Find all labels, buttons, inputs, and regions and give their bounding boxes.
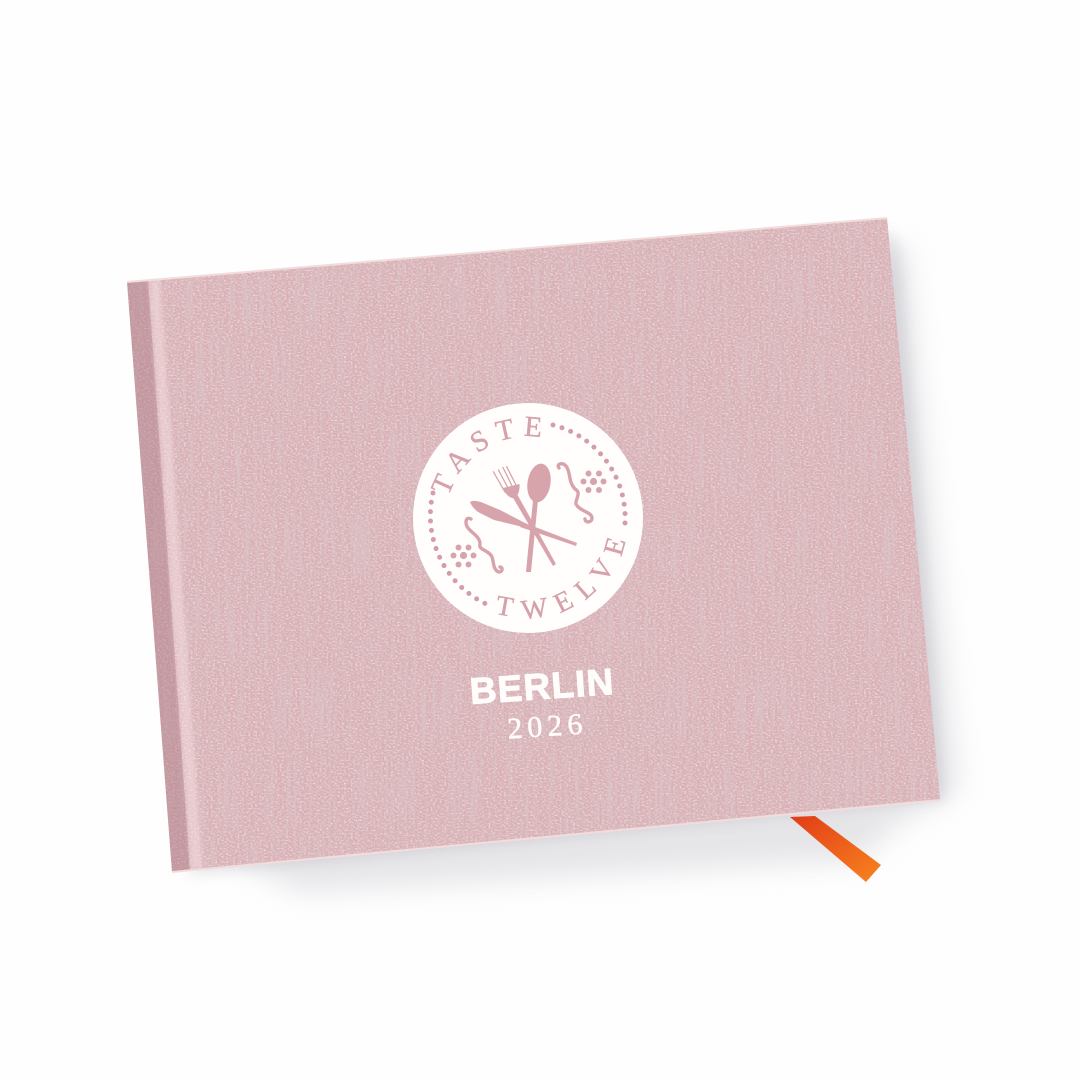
emblem: Taste Twelve plate logo bbox=[413, 403, 643, 633]
book shadow bbox=[185, 230, 958, 892]
fork bbox=[493, 467, 556, 566]
notebook cover bbox=[120, 210, 950, 880]
icon: right grape cluster bbox=[580, 470, 606, 493]
subtitle: 2026: 2026 bbox=[506, 707, 588, 746]
bookmark ribbon bbox=[790, 816, 881, 882]
arc text: TASTE: TASTE bbox=[430, 416, 540, 492]
spine bbox=[127, 279, 203, 872]
top and bottom cover edges bbox=[127, 218, 940, 872]
white plate circle bbox=[413, 403, 643, 633]
arc text: TWELVE: TWELVE bbox=[498, 538, 626, 620]
dotted border arcs bbox=[430, 425, 625, 607]
linen texture bbox=[120, 210, 950, 880]
knife bbox=[470, 501, 577, 546]
icon: left ribbon swirl bbox=[466, 518, 502, 572]
title: BERLIN: BERLIN bbox=[468, 661, 616, 712]
cover cloth bbox=[127, 218, 940, 872]
icon: right ribbon swirl bbox=[558, 464, 592, 522]
product photo: notebook on white background bbox=[127, 217, 964, 899]
icon: crossed cutlery bbox=[470, 462, 577, 572]
spoon bbox=[525, 462, 553, 572]
icon: left grape cluster bbox=[450, 544, 476, 568]
